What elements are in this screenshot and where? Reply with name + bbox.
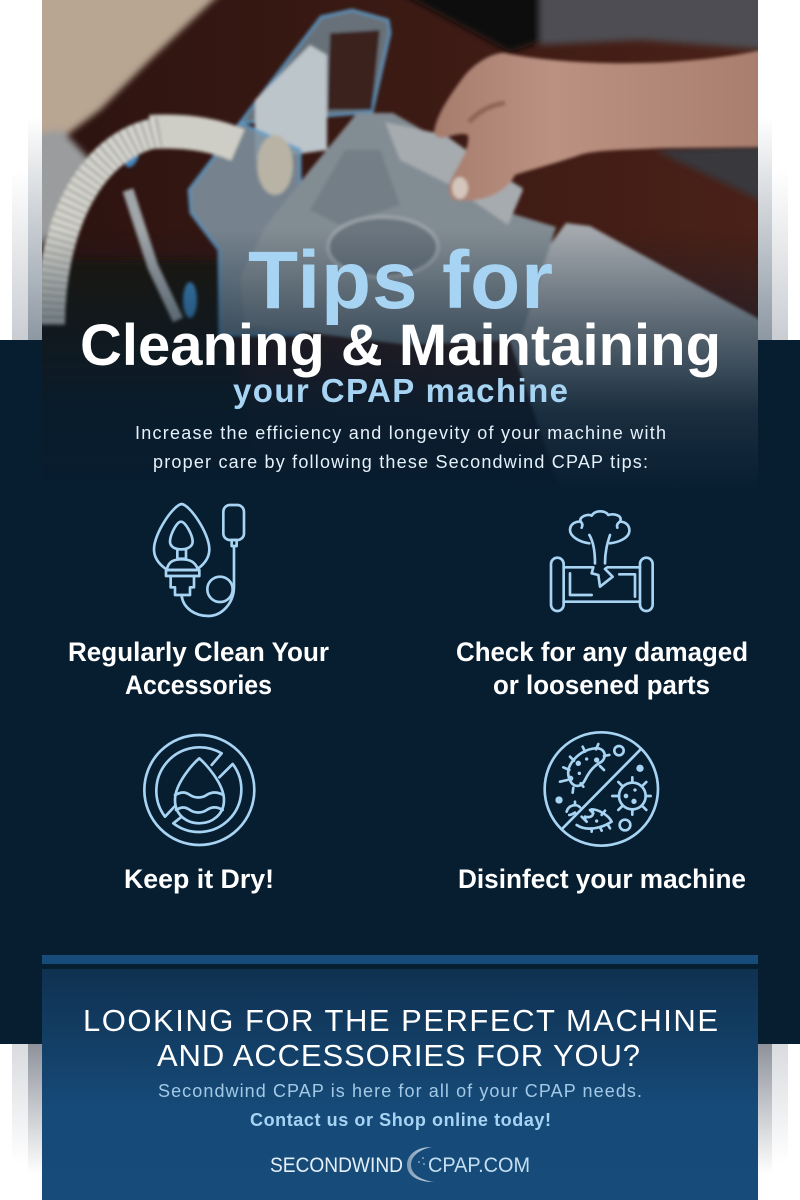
call to action heading: AND ACCESSORIES FOR YOU? bbox=[157, 1038, 640, 1073]
transparent box bbox=[240, 113, 556, 345]
smooth tube bbox=[150, 132, 238, 145]
machine body bbox=[508, 221, 758, 456]
title: Cleaning & Maintaining bbox=[80, 313, 721, 378]
strap and clips bbox=[128, 190, 178, 320]
tip: disinfect your machine bbox=[458, 732, 746, 894]
intro text bbox=[135, 423, 666, 472]
call to action text: Secondwind CPAP is here for all of your CPAP needs. bbox=[158, 1081, 642, 1101]
heading bbox=[456, 637, 748, 700]
heading: Check for any damaged bbox=[456, 637, 748, 667]
chamber body bbox=[189, 123, 300, 335]
heading: Accessories bbox=[125, 670, 272, 700]
hand bbox=[434, 48, 770, 201]
tip: regularly clean your accessories bbox=[68, 504, 329, 700]
header photo: hand lifting CPAP water chamber bbox=[30, 0, 770, 490]
heading: Regularly Clean Your bbox=[68, 637, 329, 667]
heading: Disinfect your machine bbox=[458, 864, 746, 894]
icon: burst pipe bbox=[551, 511, 653, 611]
call to action text bbox=[158, 1081, 642, 1130]
icon: crescent moon bbox=[407, 1147, 434, 1182]
title: your CPAP machine bbox=[233, 372, 568, 409]
title: Tips for bbox=[248, 235, 553, 326]
corrugated tube bbox=[50, 132, 160, 325]
chamber tip bbox=[240, 10, 390, 123]
call to action heading bbox=[83, 1003, 718, 1073]
logo: Secondwind CPAP: SECONDWIND bbox=[270, 1154, 403, 1177]
heading: or loosened parts bbox=[493, 670, 710, 700]
heading: Keep it Dry! bbox=[124, 864, 274, 894]
icon: germs crossed out bbox=[545, 732, 658, 846]
logo: Secondwind CPAP bbox=[270, 1147, 530, 1182]
panel: call to action bbox=[42, 969, 758, 1200]
intro text: Increase the efficiency and longevity of your machine with bbox=[135, 423, 666, 443]
call to action text: Contact us or Shop online today! bbox=[250, 1110, 551, 1130]
icon: no water drop bbox=[144, 735, 254, 845]
heading bbox=[68, 637, 329, 700]
tip: check for damaged parts bbox=[456, 511, 748, 700]
icon: CPAP mask and tube bbox=[154, 504, 244, 616]
tip: keep it dry bbox=[124, 735, 274, 894]
call to action heading: LOOKING FOR THE PERFECT MACHINE bbox=[83, 1003, 718, 1038]
dark background band bbox=[0, 340, 800, 1044]
logo: Secondwind CPAP: CPAP.COM bbox=[428, 1154, 530, 1177]
intro text: proper care by following these Secondwind CPAP tips: bbox=[153, 452, 648, 472]
title bbox=[80, 235, 721, 409]
